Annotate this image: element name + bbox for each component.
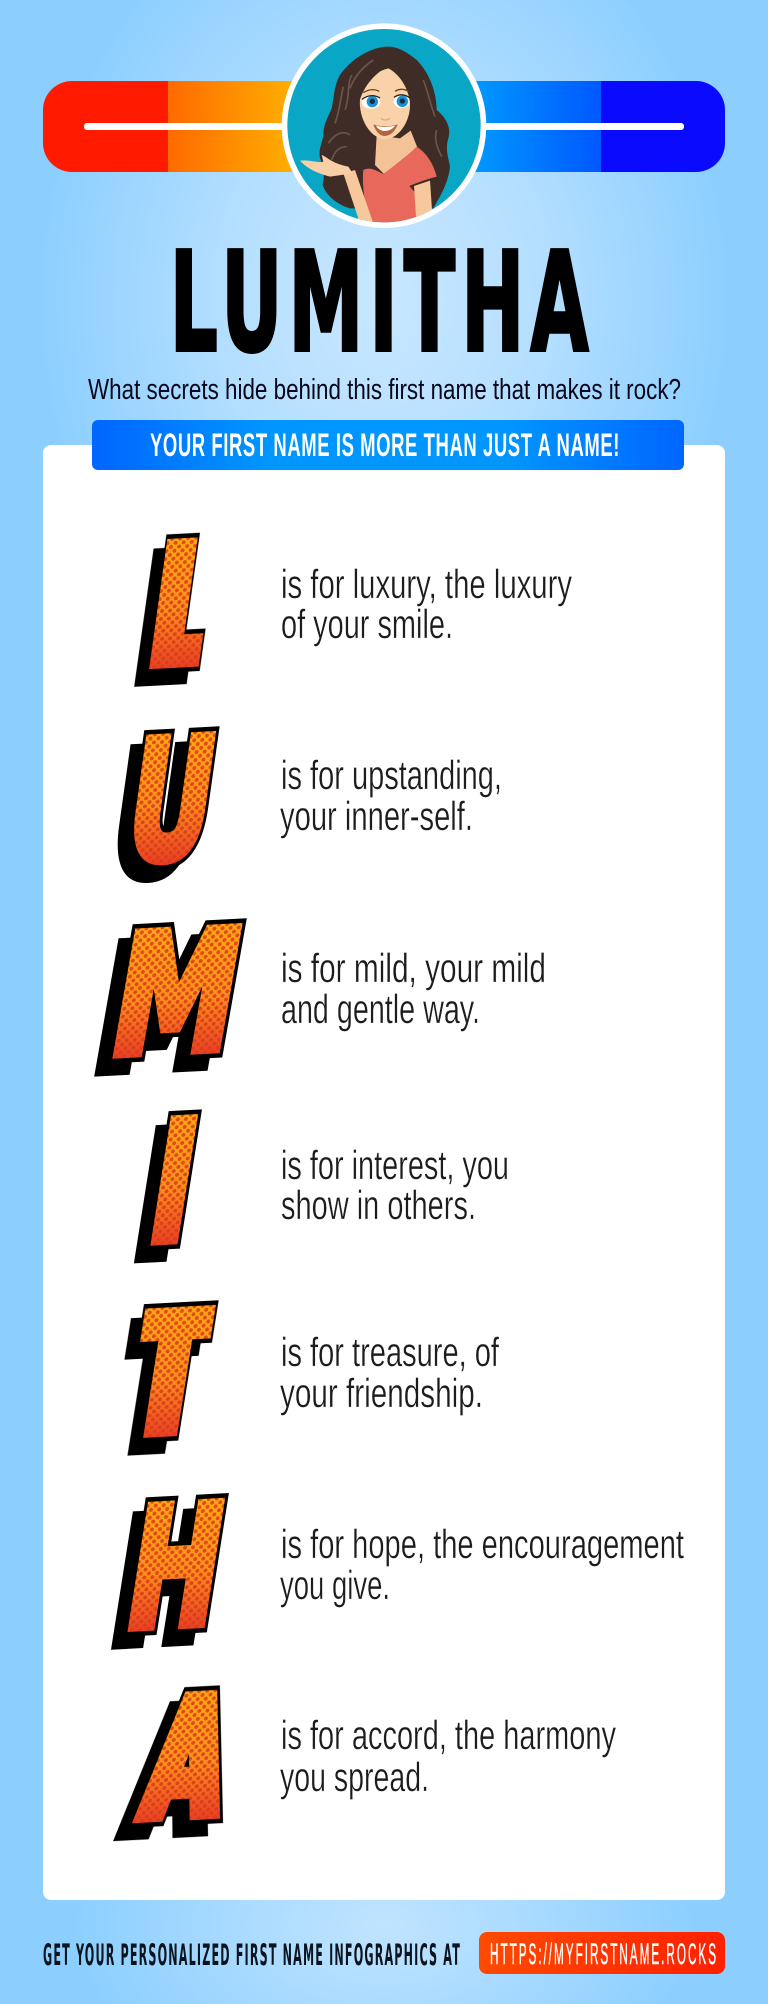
text: M line: is for mild, your mild <box>281 945 546 991</box>
letter A: A <box>117 1676 229 1871</box>
letter M: M <box>99 894 255 1093</box>
text: L line <box>281 561 572 647</box>
panel: white content card <box>43 445 725 1900</box>
letter U: U <box>103 716 212 913</box>
letter I <box>134 1109 202 1264</box>
text: M line <box>281 945 546 1032</box>
text: U line: your inner-self. <box>280 793 473 839</box>
avatar portrait <box>282 23 486 228</box>
text: A line <box>280 1712 616 1800</box>
text: U line: is for upstanding, <box>281 752 502 798</box>
letter T: T <box>129 1278 211 1473</box>
text: L line: is for luxury, the luxury <box>281 561 572 607</box>
letter T: T <box>116 1292 198 1486</box>
header colour bar <box>43 81 725 172</box>
text: I line: show in others. <box>281 1182 476 1228</box>
letter L: L <box>149 510 213 704</box>
text: U line <box>280 752 502 839</box>
banner <box>92 420 684 470</box>
text: T line <box>280 1329 499 1416</box>
letter H: H <box>115 1470 236 1667</box>
text: T line: is for treasure, of <box>281 1329 499 1375</box>
text: I line: is for interest, you <box>281 1142 509 1188</box>
letter M: M <box>84 908 241 1107</box>
letter A: A <box>132 1662 244 1858</box>
text: H line: you give. <box>280 1562 390 1608</box>
footer url button <box>479 1932 725 1974</box>
text: A line: you spread. <box>280 1754 429 1800</box>
text: M line: and gentle way. <box>281 986 480 1032</box>
letter I: I <box>138 1087 209 1281</box>
text: L line: of your smile. <box>281 601 453 647</box>
text: T line: your friendship. <box>280 1370 483 1416</box>
text: A line: is for accord, the harmony <box>281 1712 616 1758</box>
text: H line <box>280 1521 684 1608</box>
letter H: H <box>102 1484 223 1681</box>
letter I: I <box>125 1101 196 1294</box>
letter L: L <box>136 524 200 717</box>
letter U: U <box>117 703 226 900</box>
text: I line <box>281 1142 509 1228</box>
